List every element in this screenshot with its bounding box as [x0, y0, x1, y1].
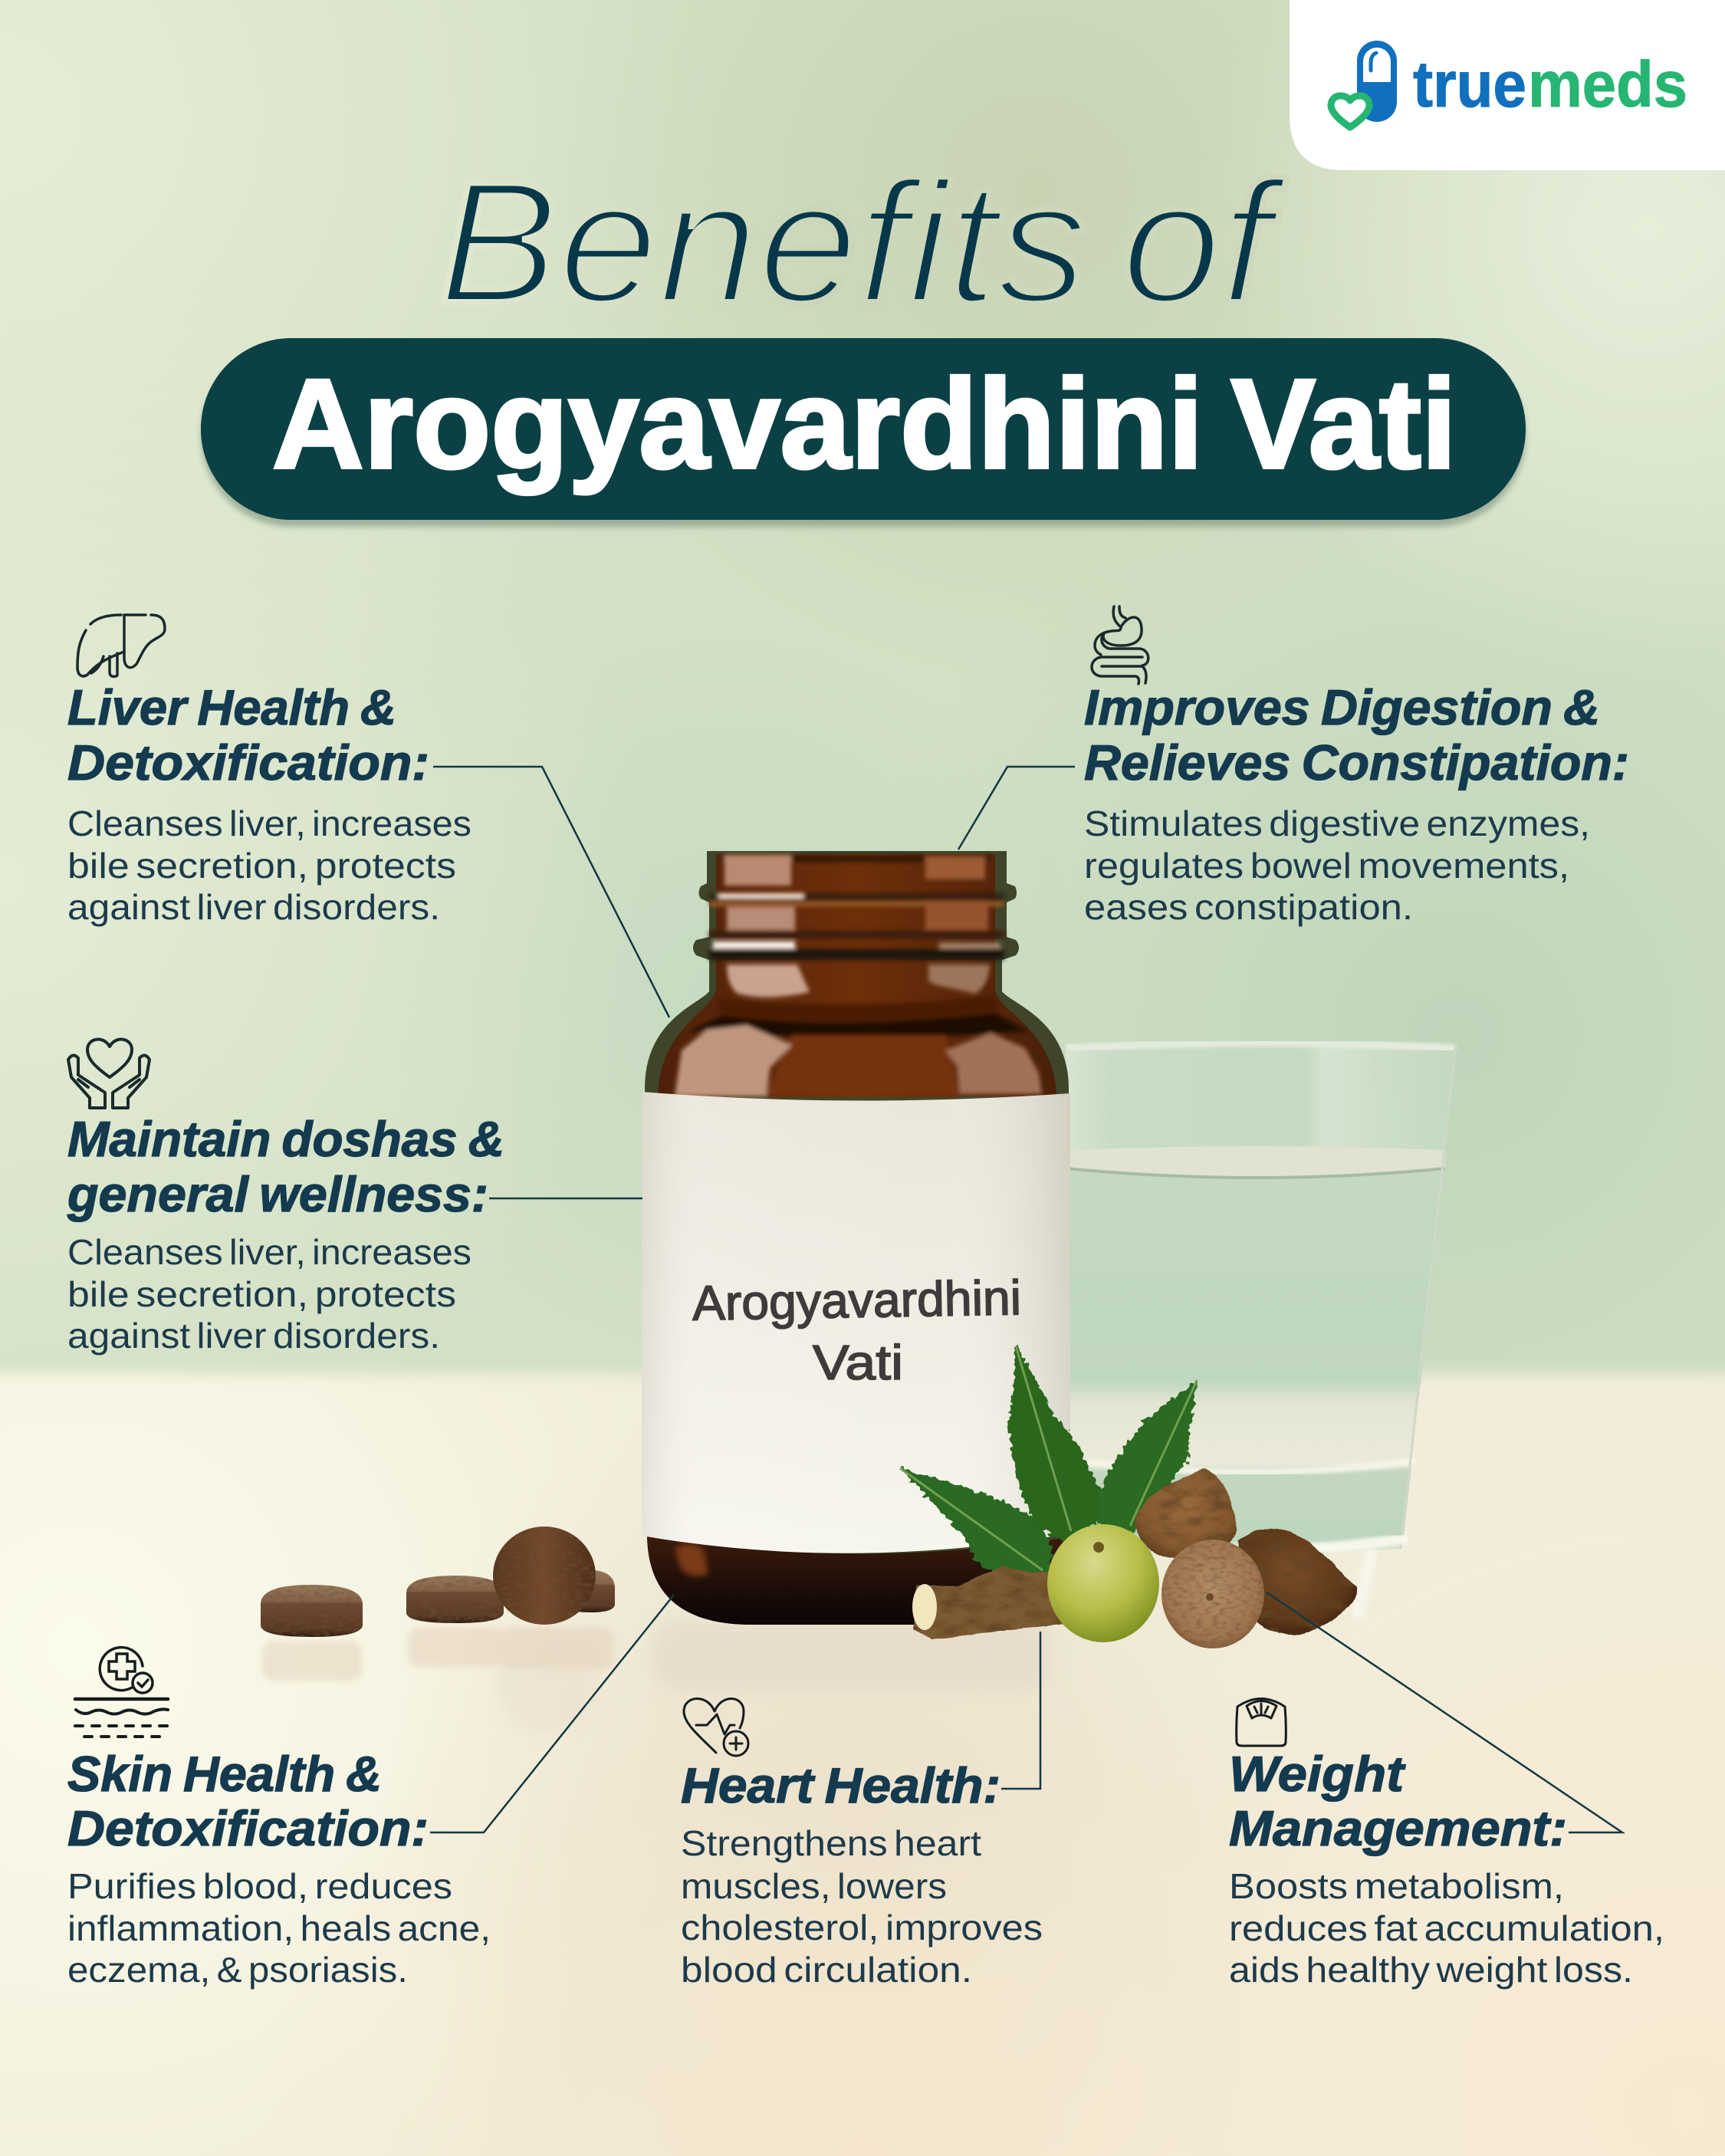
bottle label text: Vati: [813, 1335, 903, 1390]
product: tablets with reflections: [261, 1527, 615, 1733]
title pill: [201, 338, 1526, 527]
panel: doshas: against liver disorders.: [67, 1316, 440, 1356]
shoulder: [767, 1035, 960, 1096]
heading: Improves Digestion &: [1084, 679, 1600, 735]
panel: skin health: [67, 1648, 491, 1990]
panel: skin health: eczema, & psoriasis.: [67, 1950, 408, 1990]
panel: skin health: Detoxification:: [67, 1800, 429, 1856]
leader line: liver: [433, 767, 669, 1017]
icon: stomach and intestines: [1092, 606, 1148, 684]
panel: heart health: [681, 1698, 1043, 1990]
heading: Heart Health:: [681, 1757, 1001, 1813]
bottle base: [647, 1533, 1069, 1625]
panel: liver health: against liver disorders.: [67, 887, 440, 927]
panel: heart health: blood circulation.: [681, 1950, 972, 1990]
heading: Weight: [1229, 1746, 1405, 1802]
neem leaf: left: [899, 1467, 1052, 1576]
heading: Liver Health &: [67, 679, 396, 735]
neem leaf: right: [1097, 1380, 1198, 1533]
panel: liver health: bile secretion, protects: [67, 846, 456, 886]
product: amber bottle: [642, 851, 1070, 1691]
icon: capsule: [1357, 41, 1397, 122]
pill heading: Arogyavardhini Vati: [272, 353, 1457, 495]
panel: doshas: bile secretion, protects: [67, 1274, 456, 1314]
logo wordmark: meds: meds: [1528, 48, 1687, 120]
amla fruit: [1047, 1524, 1159, 1642]
icon: heart: [1331, 96, 1369, 127]
leader line: weight: [1267, 1592, 1622, 1832]
logo wordmark: true: true: [1413, 48, 1526, 120]
bottle label text: [692, 1270, 1022, 1390]
product: herbs and fruits: [899, 1344, 1357, 1648]
panel: weight management: Management:: [1229, 1800, 1567, 1856]
logo panel: [1290, 0, 1725, 170]
body text: Strengthens heart: [681, 1823, 981, 1863]
body text: Cleanses liver, increases: [67, 1232, 472, 1272]
panel: weight management: reduces fat accumulation,: [1229, 1908, 1664, 1948]
product: water glass: [1066, 1043, 1456, 1618]
panel: liver health: [67, 615, 472, 927]
nut: front: [1162, 1540, 1264, 1648]
panel: digestion: Relieves Constipation:: [1084, 735, 1629, 790]
bottle reflection: [652, 1622, 1050, 1691]
neem leaf: centre: [1009, 1344, 1104, 1546]
leader line: doshas: [489, 1198, 642, 1199]
panel: digestion: regulates bowel movements,: [1084, 846, 1569, 886]
root piece: [912, 1566, 1070, 1639]
panel: skin health: inflammation, heals acne,: [67, 1908, 491, 1948]
neck highlights: [724, 855, 791, 886]
panel: weight management: [1229, 1699, 1664, 1990]
panel: liver health: Detoxification:: [67, 735, 429, 790]
leader line: skin: [430, 1595, 674, 1832]
icon: skin layers: [75, 1648, 168, 1737]
bottle glass silhouette: [645, 851, 1069, 1625]
heading: Skin Health &: [67, 1746, 382, 1802]
panel: digestion: eases constipation.: [1084, 887, 1413, 927]
panel: digestion: [1084, 606, 1629, 927]
body text: Stimulates digestive enzymes,: [1084, 804, 1590, 843]
title: Benefits of: Benefits of: [439, 145, 1287, 339]
leader line: heart: [1001, 1632, 1040, 1789]
nut: right: [1238, 1529, 1357, 1635]
leader line: digestion: [958, 767, 1075, 850]
panel: heart health: muscles, lowers: [681, 1866, 947, 1906]
bottle amber body: [658, 854, 1056, 1096]
background: cream table surface: [0, 1374, 1725, 2156]
panel: weight management: aids healthy weight loss.: [1229, 1950, 1633, 1990]
water: [1067, 1168, 1444, 1547]
heading: Maintain doshas &: [67, 1111, 504, 1167]
nut: upper: [1135, 1468, 1236, 1557]
body text: Purifies blood, reduces: [67, 1866, 452, 1906]
icon: heart with pulse: [684, 1698, 748, 1756]
icon: weighing scale: [1237, 1699, 1286, 1746]
panel: doshas: general wellness:: [67, 1166, 488, 1222]
background: green wall: [0, 0, 1725, 1403]
icon: hands holding heart: [68, 1040, 150, 1108]
bottle label: [642, 1092, 1070, 1553]
body text: Boosts metabolism,: [1229, 1866, 1564, 1906]
body text: Cleanses liver, increases: [67, 804, 472, 843]
icon: liver: [77, 615, 165, 676]
bottle label text: Arogyavardhini: [692, 1270, 1022, 1331]
panel: doshas: [67, 1040, 504, 1356]
panel: heart health: cholesterol, improves: [681, 1908, 1043, 1947]
